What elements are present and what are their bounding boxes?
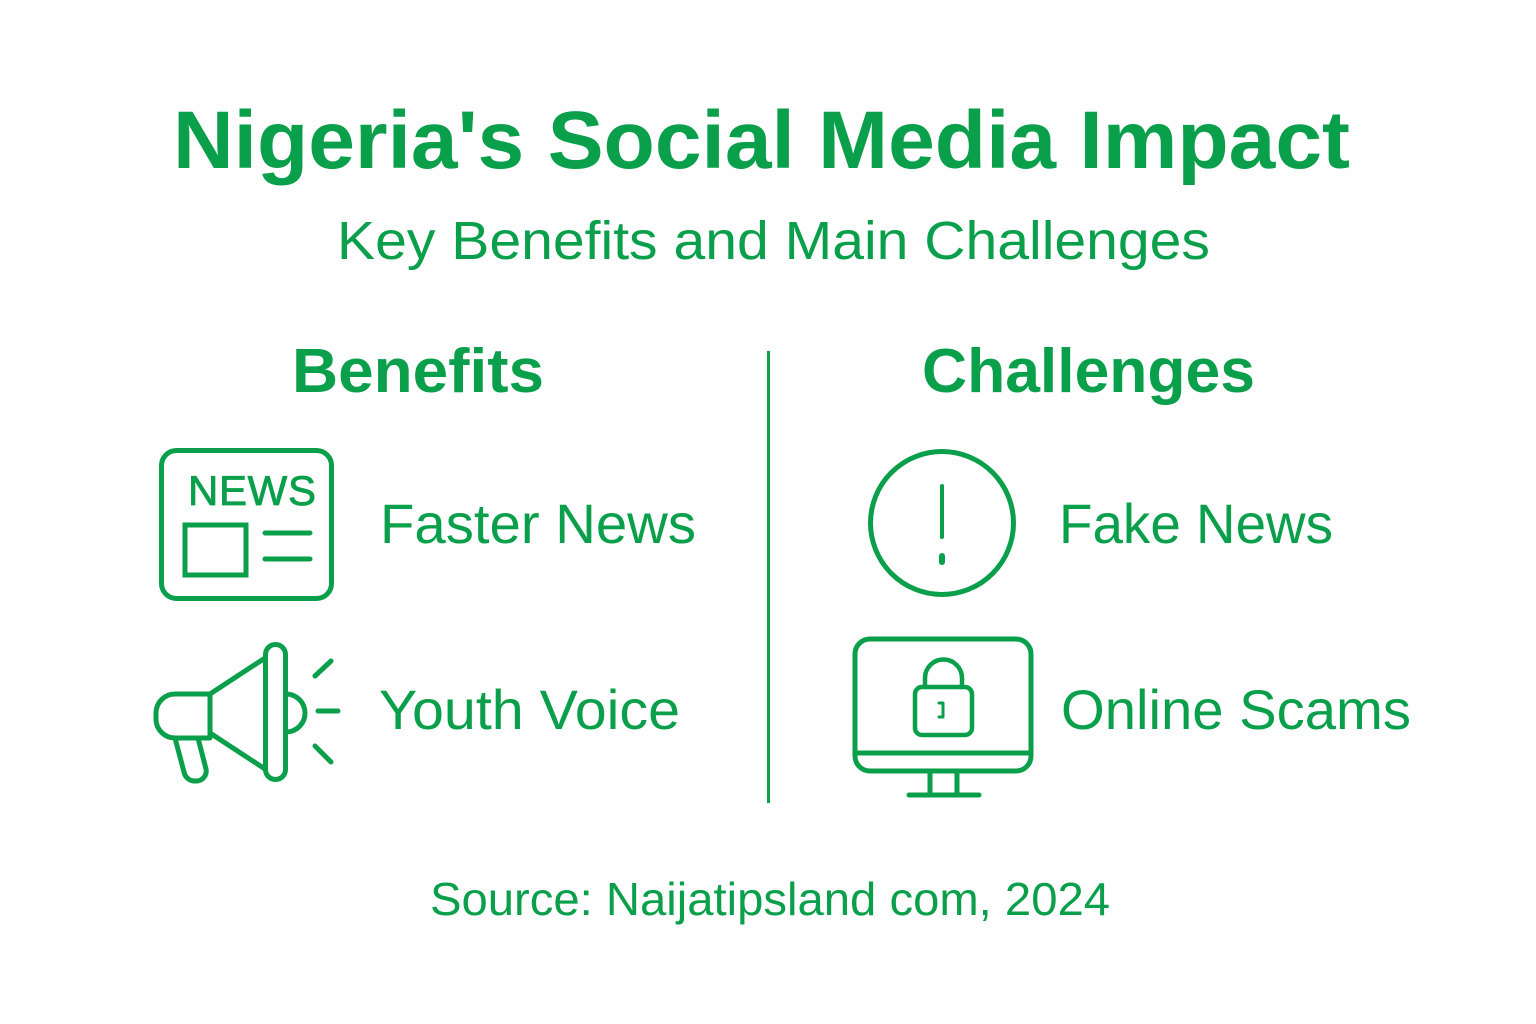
source note: Source: Naijatipsland com, 2024 [430,873,1110,925]
icon: news: NEWS [188,467,316,514]
icon: megaphone [156,644,338,781]
label: faster news: Faster News [380,492,696,555]
panel: benefits [156,337,696,781]
panel: challenges [855,337,1411,795]
label: online scams: Online Scams [1061,678,1411,741]
subtitle: Key Benefits and Main Challenges [337,211,1210,271]
icon: news [162,450,332,598]
label: youth voice: Youth Voice [379,678,680,741]
heading: benefits: Benefits [292,337,544,406]
heading: challenges: Challenges [922,337,1255,406]
center divider [767,351,770,803]
label: fake news: Fake News [1059,492,1333,555]
title: Nigeria's Social Media Impact [173,95,1350,186]
icon: locked monitor [855,639,1031,795]
icon: warning circle [870,452,1014,594]
